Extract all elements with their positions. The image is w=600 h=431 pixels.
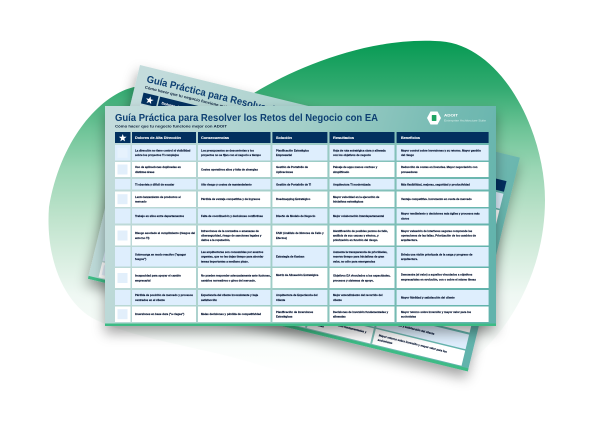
table row 9: Mayor fidelidad y satisfacción del cliente [401,296,455,300]
table row 4: Mayor velocidad en la ejecución de [333,195,380,199]
table row 9: Pérdida de posición de mercado y procesos [135,293,193,297]
table row 6: FAIR (Análisis de Motores de Fallo y [276,231,324,235]
table row 1 [115,145,489,160]
table header row: Consecuencias [201,136,229,140]
table row 9: Cliente [276,298,286,302]
table row 9: centrados en el cliente [135,298,165,302]
table row 3: Gestión de Portafolio de TI [276,182,311,186]
panel: front guide page [105,106,496,326]
table row 9: Experiencia del cliente inconsistente y baja [201,293,258,297]
table row 7: valor, no sólo para emergencias [333,259,376,263]
table row 1: Los presupuestos se descontrolan y los [201,148,254,152]
table row 8: procesos y sistemas de apoyo. [333,278,374,282]
table row 1: La dirección no tiene control ni visibilidad [135,148,191,152]
table row 6: arquitectura. [401,238,418,242]
table row 4: Lento lanzamiento de productos al [135,195,181,199]
table row 3: Alto riesgo y costes de mantenimiento [201,182,252,186]
table row 10: Planificación de Inversiones [276,310,314,314]
table row 9: Arquitectura de Experiencia del [276,293,318,297]
rear page table body [99,105,503,366]
table row 1: Mayor control sobre inversiones y su retorno. Mayor gestión [401,148,481,152]
subtitle: Cómo hacer que tu negocio funcione mejor con ADOIT [115,124,228,129]
rear page last rows text: Mejor entendimiento del recorrido del cliente [316,303,374,321]
table row 7 [115,247,489,266]
table row 2: Aplicaciones [276,170,294,174]
table row 10: Mayor retorno sobre inversión y mayor valor para los [401,310,472,314]
table row 6: Mayor valuación de interfaces seguras comprende las [401,229,473,233]
background green blob [48,41,545,387]
table row 3 [115,179,489,190]
rear page last rows text: alineadas [311,322,325,329]
table row 1: Planificación Estratégica [276,148,309,152]
table row 6: operaciones de las fallas. Priorización de los cambios de [401,234,476,238]
table row 6: Efectos) [276,236,287,240]
table row 9: cliente [333,298,342,302]
rear page last rows text: Mayor retorno sobre inversión y mayor valor para los [378,333,448,354]
table row 5: Mejor colaboración interdepartamental [333,214,384,218]
logo: ADOIT [427,112,486,124]
table row 5 [115,208,489,224]
table row 5: Diseño de Modelo de Negocio [276,214,316,218]
table row 8: No pueden responder adecuadamente ante fusiones, [201,274,271,278]
table row 10: Decisiones de inversión fundamentadas y [333,310,389,314]
table row 4: Ventaja competitiva. Incremento en cuota de mercado [401,197,472,201]
title: Guía Práctica para Resolver los Retos del Negocio con EA [115,113,378,124]
rear page title: Guía Práctica para Resolver los Retos del Negocio con EA [145,74,404,147]
table row 7: Estrategia de Kanban [276,255,305,259]
rear page table header: Dolores de Alta Dirección [161,101,207,116]
panel: rear rotated guide page [88,65,520,371]
table row 2 [115,162,489,177]
table row 10: Malas decisiones y pérdida de competitividad [201,312,261,316]
table row 9: satisfacción [201,298,217,302]
table row 1: con los objetivos de negocio [333,153,371,157]
table row 7: urgentes, que no les dejan tiempo para abordar [201,255,264,259]
table row 6 [115,226,489,246]
table row 9: Mejor entendimiento del recorrido del [333,293,383,297]
table row 7: Brinda una visión priorizada de la carga y progreso de [401,252,473,256]
table row 6: análisis de sus causas y efectos, y [333,234,379,238]
table row 6: entorno TI) [135,236,150,240]
table row 2: Paisaje de apps menos confuso y [333,165,378,169]
table row 7: fuegos") [135,257,146,261]
table row 8: empresarial [135,278,151,282]
table row 1: del riesgo [401,153,414,157]
table row 3: Arquitectura TI modernizada [333,182,371,186]
table header row: Resultados [333,136,354,140]
table row 1: proyectos no se fijan con el negocio a tiempo [201,153,261,157]
table row 8: cambios normativos o giros del mercado. [201,278,256,282]
table row 5: Trabajo en silos entre departamentos [135,214,184,218]
table row 10 [115,306,489,322]
table row 9 [115,290,489,305]
logo: ADOIT: ADOIT [444,114,459,118]
table row 8: Incapacidad para apoyar el cambio [135,274,181,278]
table row 8: Objetivos EA vinculados a las capacidades, [333,274,391,278]
rear page subtitle: Cómo hacer que tu negocio funcione mejor con ADOIT [144,84,255,116]
table row 2: Costes operativos altos y falta de sinergias [201,168,258,172]
table row 4 [115,192,489,207]
logo: ADOIT: Enterprise Architecture Suite [444,119,486,123]
table row 8: empresariales en evolución, con o sobre el mismo líneas [401,277,476,281]
table row 6: priorización en función del riesgo. [333,238,378,242]
table row 2: proveedores [401,170,418,174]
rear page table header [141,93,507,192]
table row 5: claros [401,216,410,220]
table row 8 [115,268,489,288]
rear page last rows text: accionistas [377,338,393,345]
table row 4: Pérdida de ventaja competitiva y de ingresos [201,197,261,201]
table row 1: Hoja de ruta estratégica clara y alineada [333,148,386,152]
table row 10: Inversiones en base dura ("a ciegas") [135,312,184,316]
table row 6: Identificación de posibles puntos de fallo, [333,229,388,233]
table row 5: Mayor rendimiento y decisiones más ágiles y procesos más [401,212,480,216]
table row 2: Uso de aplicaciones duplicadas en [135,165,181,169]
rear page last rows text [311,303,451,358]
table row 7: Aumenta la transparencia de prioridades, [333,250,388,254]
rear page last rows text: Decisiones de inversión fundamentadas y [312,317,367,334]
table row 7: Sobrecarga en modo reactivo ("apagar [135,252,187,256]
table row 1: Empresarial [276,153,292,157]
table row 2: distintas áreas [135,170,155,174]
table row 6: Riesgo asociado al cumplimiento (riesgos del [135,231,195,235]
icon: star [119,134,127,141]
table row 8: Demuestra (el valor) a aquellos vinculados a objetivos [401,273,473,277]
rear page last rows text: Mayor fidelidad y satisfacción del cliente [382,319,435,336]
table row 7: temas importantes a mediano plazo. [201,259,249,263]
table row 10: accionistas [401,314,417,318]
table row 2: Reducción de costes en licencias. Mayor negociación con [401,165,478,169]
front page background [105,106,496,326]
table row 10: Estratégicas [276,314,293,318]
table row 4: mercado [135,200,147,204]
table header row: Beneficios [401,136,420,140]
table row 4: Roadmapping Estratégico [276,197,311,201]
table row 3: Más flexibilidad, mejoras, seguridad y productividad [401,182,470,186]
table row 1: sobre los proyectos TI complejos [135,153,179,157]
table header row [115,132,489,143]
table header row: Solución [276,136,292,140]
table row 7: arquitectura. [401,257,418,261]
table row 4: iniciativas estratégicas [333,200,364,204]
table header row: Dolores de Alta Dirección [135,136,181,140]
table row 2: simplificado [333,170,349,174]
table row 3: TI obsoleta y difícil de escalar [135,182,175,186]
table row 7: reserva tiempo para iniciativas de gran [333,255,384,259]
table row 10: alineadas [333,314,346,318]
table row 6: daños a la reputación. [201,238,230,242]
table row 8: Matriz de Alineación Estratégica [276,273,319,277]
table row 6: Infracciones de la normativa o amenazas de [201,229,259,233]
table row 5: Falta de coordinación y decisiones conflictivas [201,214,263,218]
table row 6: ciberseguridad, riesgo de sanciones legales y [201,234,262,238]
bottom green strip [105,324,496,326]
table row 2: Gestión de Portafolio de [276,165,308,169]
table row 7: Las arquitecturas son consumidas por asuntos [201,250,264,254]
